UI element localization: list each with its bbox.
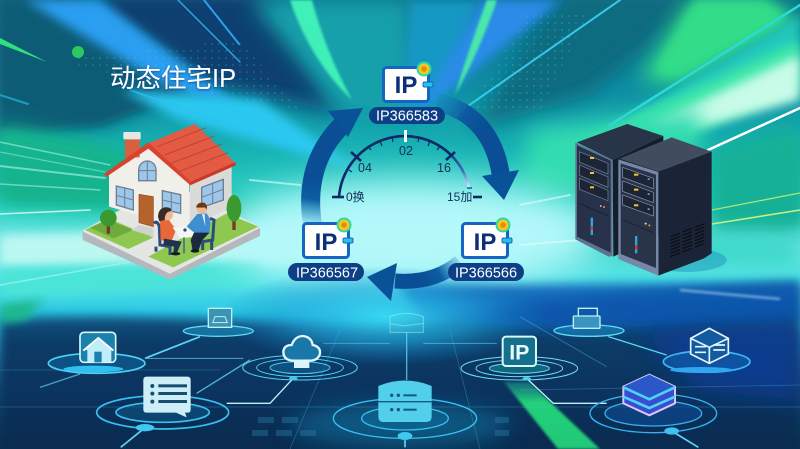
arrow: IP366567 to IP366583 (311, 108, 363, 228)
network nodes left half (40, 308, 390, 447)
gauge dial: 04 (358, 161, 372, 175)
arrow: IP366583 to IP366566 (437, 102, 519, 200)
node: faint database (390, 313, 423, 332)
IP card: IP366583: IP366583 (376, 108, 438, 124)
gauge dial: 16 (437, 161, 451, 175)
node: IP: IP (509, 340, 529, 364)
node: printer (554, 308, 624, 336)
icon: server racks (575, 124, 727, 276)
node: cloud (243, 336, 357, 380)
IP card: IP366567 (288, 218, 364, 282)
icon: house with two people (84, 124, 259, 278)
IP card: IP366583 (369, 62, 445, 124)
title: 动态住宅IP (110, 65, 236, 93)
gauge dial: 02 (399, 144, 413, 158)
gauge dial: 15加 (447, 190, 472, 204)
ground network base (0, 266, 800, 449)
IP card: IP366567: IP (315, 229, 337, 256)
IP card: IP366566: IP366566 (455, 266, 517, 282)
network nodes right half (333, 308, 750, 447)
node: home (48, 332, 145, 373)
node: message list (97, 377, 229, 431)
node: cube (663, 328, 750, 373)
IP card: IP366567: IP366567 (296, 266, 358, 282)
node: database (333, 380, 477, 440)
node: stacked cube (590, 375, 717, 435)
IP card: IP366566 (448, 218, 524, 282)
arrow: IP366566 to IP366567 (367, 262, 460, 301)
IP card: IP366566: IP (474, 229, 496, 256)
IP card: IP366583: IP (395, 72, 417, 99)
gauge dial (332, 130, 482, 204)
node: IP (461, 337, 578, 380)
gauge dial: 0换 (346, 190, 365, 204)
node: screen (183, 308, 253, 336)
